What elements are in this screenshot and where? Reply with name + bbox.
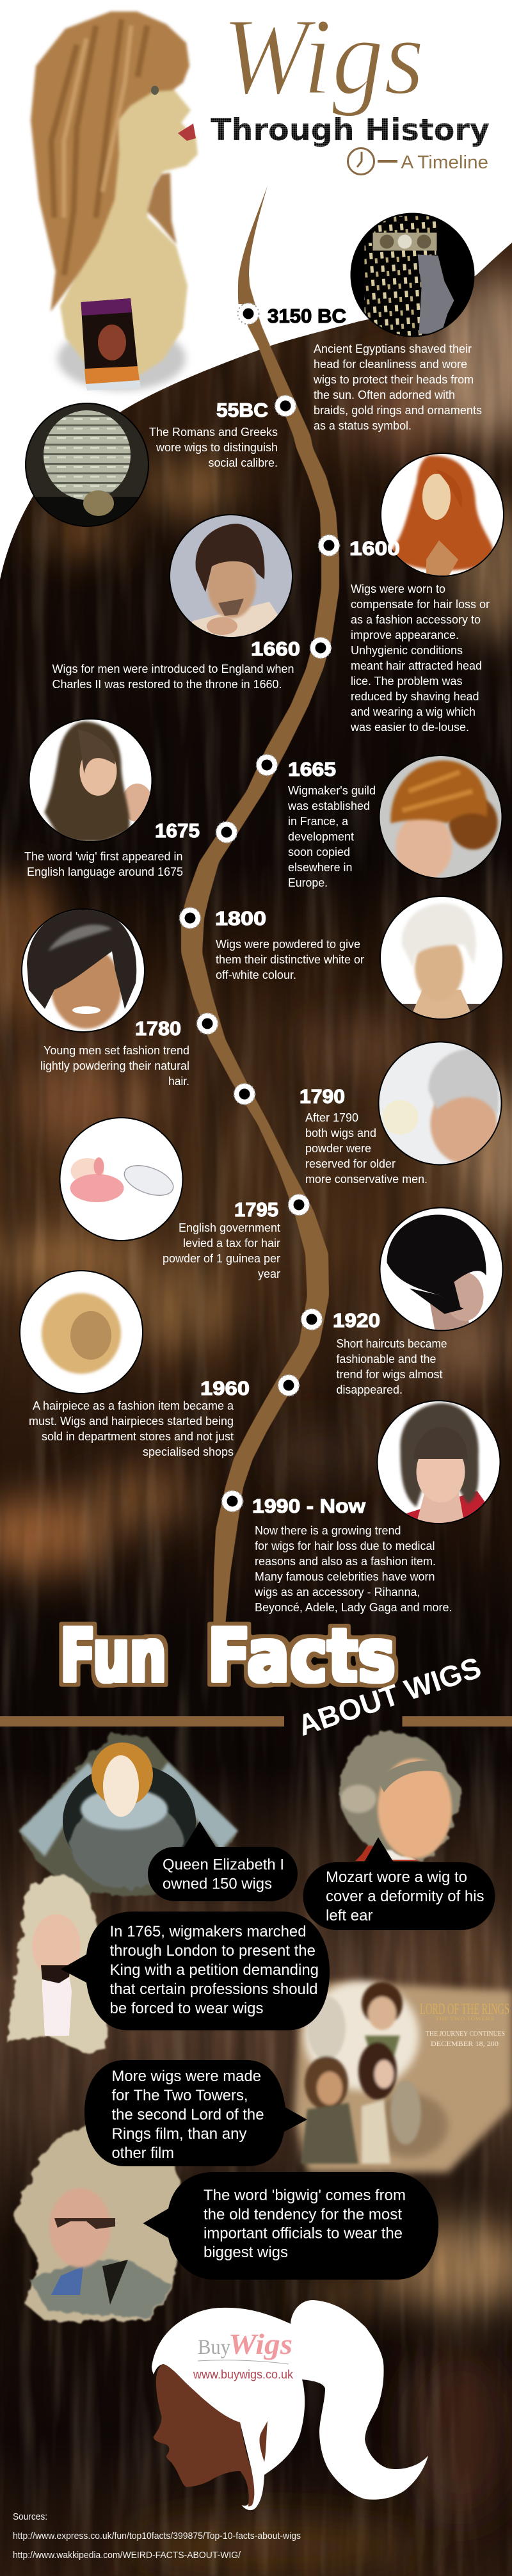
entry: 1665: 1665	[288, 758, 336, 780]
entry: 1665	[287, 758, 376, 889]
face silhouette	[154, 2364, 254, 2506]
portrait: man with grey wig and powder jar	[378, 1041, 502, 1165]
entry: 1990 - Now: 1990 - Now	[252, 1495, 366, 1517]
entry: 1795	[163, 1198, 280, 1280]
bubble: 1765 wigmakers: through London to present the	[110, 1942, 316, 1960]
entry: 1780	[40, 1017, 189, 1088]
title	[211, 0, 490, 174]
bubble: Mozart: left ear	[326, 1907, 373, 1924]
entry: 1920	[333, 1309, 447, 1396]
entry: 3150 BC: Ancient Egyptians shaved their	[314, 342, 472, 355]
portrait: black bob	[379, 1207, 503, 1332]
entry: 3150 BC: wigs to protect their heads from	[313, 373, 474, 386]
entry: 1800	[215, 907, 364, 981]
entry: 1960: specialised shops	[143, 1445, 234, 1458]
entry: 1600: compensate for hair loss or	[351, 597, 490, 611]
entry: 1665: elsewhere in	[288, 860, 352, 874]
entry: 3150 BC: braids, gold rings and ornaments	[314, 403, 482, 417]
product tag	[81, 298, 141, 390]
entry: 1960	[29, 1377, 250, 1458]
poster titles: DECEMBER 18, 200	[431, 2041, 499, 2048]
logo text Wigs: Wigs	[228, 2328, 292, 2360]
entry: 55BC	[149, 399, 278, 469]
entry: 1960: 1960	[200, 1377, 250, 1399]
bubble: bigwig: The word 'bigwig' comes from	[204, 2187, 406, 2204]
entry: 55BC: The Romans and Greeks	[149, 425, 278, 439]
entry: 1790: powder were	[305, 1141, 371, 1155]
portrait: Phil Spector caricature	[13, 2123, 179, 2321]
heading: Fun Facts: Facts	[207, 1613, 396, 1698]
entry: 1600: improve appearance.	[351, 628, 459, 641]
entry: 1990 - Now: for wigs for hair loss due to medical	[255, 1539, 435, 1552]
entry: 1675: The word 'wig' first appeared in	[24, 849, 183, 863]
portrait: judge's wig	[25, 403, 149, 529]
entry: 1795: 1795	[234, 1198, 278, 1221]
timeline ribbon	[181, 186, 339, 1645]
entry: 1920: disappeared.	[337, 1383, 403, 1396]
portrait: brunette bob	[376, 1400, 500, 1524]
entry: 55BC: wore wigs to distinguish	[156, 440, 278, 454]
entry: 1600: lice. The problem was	[351, 674, 462, 688]
entry: 1920: fashionable and the	[337, 1352, 436, 1365]
entry: 1665: development	[288, 830, 354, 843]
portrait: woman with wavy brown wig	[28, 718, 152, 842]
portrait: Mozart	[339, 1732, 462, 1861]
entry: 1790: more conservative men.	[305, 1172, 428, 1186]
bubble: The Two Towers: Rings film, than any	[111, 2125, 247, 2143]
entry: 1790: 1790	[300, 1085, 345, 1107]
entry: 1780: hair.	[168, 1074, 189, 1088]
entry: 1665: in France, a	[288, 814, 349, 828]
bubble: Queen Elizabeth: owned 150 wigs	[163, 1876, 272, 1892]
entry: 1990 - Now: Beyoncé, Adele, Lady Gaga and more.	[255, 1600, 452, 1614]
entry: 1660: 1660	[251, 638, 300, 660]
bubble: bigwig	[143, 2172, 438, 2280]
entry: 1990 - Now	[252, 1495, 452, 1614]
bubble: Mozart: Mozart wore a wig to	[326, 1869, 467, 1886]
entry: 1920: trend for wigs almost	[337, 1367, 443, 1381]
entry: 1600: 1600	[349, 537, 400, 559]
bubble: The Two Towers: More wigs were made	[111, 2068, 261, 2085]
entry: 1665: Europe.	[288, 876, 328, 889]
entry: 1795: English government	[179, 1221, 280, 1234]
poster figures	[301, 1982, 421, 2164]
entry: 1675	[24, 819, 200, 878]
portrait: blonde hairpiece	[19, 1270, 143, 1394]
logo url: www.buywigs.co.uk	[193, 2369, 293, 2381]
portrait: Queen Elizabeth I	[19, 1734, 238, 1895]
bubble: The Two Towers	[84, 2060, 307, 2166]
entry: 1660: Wigs for men were introduced to England when	[52, 662, 294, 675]
portrait: Lord of the Rings poster	[294, 1981, 512, 2172]
entry: 55BC: 55BC	[216, 399, 268, 421]
entry: 1920: Short haircuts became	[337, 1337, 447, 1350]
bust	[60, 83, 198, 377]
bubble: Mozart: cover a deformity of his	[326, 1888, 484, 1905]
bubble: 1765 wigmakers: In 1765, wigmakers marched	[110, 1923, 306, 1940]
portrait: man with short dark wig	[169, 514, 293, 638]
entry: 1800: 1800	[215, 907, 266, 930]
bubble: The Two Towers: the second Lord of the	[111, 2106, 264, 2123]
sources: Sources:	[13, 2511, 47, 2522]
entry: 1795: powder of 1 guinea per	[163, 1252, 280, 1265]
entry: 1960: A hairpiece as a fashion item became a	[33, 1399, 234, 1412]
heading: About Wigs: ABOUT WIGS	[294, 1650, 485, 1742]
bubble: The Two Towers: other film	[111, 2145, 174, 2162]
entry: 1675: 1675	[155, 819, 200, 842]
entry: 1780: 1780	[135, 1017, 181, 1040]
poster titles: THE JOURNEY CONTINUES	[426, 2031, 505, 2038]
entry: 1990 - Now: reasons and also as a fashion item.	[255, 1554, 436, 1568]
entry: 1665: Wigmaker's guild	[288, 784, 376, 797]
portrait: white hair	[380, 896, 504, 1023]
entry: 1600: reduced by shaving head	[351, 689, 479, 703]
heading: Fun Facts	[60, 1613, 396, 1698]
entry: 1960: must. Wigs and hairpieces started being	[29, 1414, 234, 1428]
entry: 1920: 1920	[333, 1309, 380, 1332]
white header area	[0, 0, 512, 579]
poster titles	[420, 2001, 509, 2048]
heading bars	[0, 1716, 512, 1727]
bubble: The Two Towers: for The Two Towers,	[111, 2087, 248, 2104]
entry: 1780: lightly powdering their natural	[40, 1059, 189, 1072]
sources: http://www.wakkipedia.com/WEIRD-FACTS-ABOUT-WIG/	[13, 2550, 241, 2561]
bubble: Queen Elizabeth: Queen Elizabeth I	[163, 1856, 284, 1873]
eye and lips	[151, 86, 159, 95]
entry: 1800: Wigs were powdered to give	[216, 937, 360, 951]
entry: 1790	[300, 1085, 428, 1186]
entry: 3150 BC: 3150 BC	[268, 305, 346, 327]
bubble: Mozart	[303, 1837, 495, 1930]
entry: 1600: Wigs were worn to	[351, 582, 445, 595]
entry: 1600	[349, 537, 490, 734]
bubble: bigwig: important officials to wear the	[204, 2225, 403, 2242]
mannequin with wig	[31, 12, 198, 390]
entry: 55BC: social calibre.	[209, 456, 278, 469]
entry: 1960: sold in department stores and not just	[42, 1429, 234, 1443]
entry: 1600: as a fashion accessory to	[351, 613, 481, 626]
bubble: 1765 wigmakers: that certain professions should	[110, 1981, 317, 1998]
entry: 1600: Unhygienic conditions	[351, 643, 463, 657]
sources: http://www.express.co.uk/fun/top10facts/399875/Top-10-facts-about-wigs	[13, 2531, 301, 2541]
entry: 1990 - Now: Many famous celebrities have worn	[255, 1570, 435, 1583]
wig hair	[31, 12, 189, 312]
portrait: judge caricature	[6, 1876, 108, 2055]
bubble: 1765 wigmakers	[61, 1912, 330, 2031]
entry: 1780: Young men set fashion trend	[44, 1043, 189, 1057]
entry: 1600: and wearing a wig which	[351, 705, 476, 718]
entry: 1675: English language around 1675	[27, 865, 183, 878]
portrait: Egyptian headdress	[351, 213, 475, 339]
back lock of hair	[147, 173, 177, 245]
entry: 1990 - Now: Now there is a growing trend	[255, 1524, 401, 1537]
portrait: man with dark fringe	[21, 908, 145, 1033]
heading: Fun Facts: Fun	[60, 1613, 166, 1698]
portrait: short ginger wig	[379, 755, 503, 880]
entry: 3150 BC: the sun. Often adorned with	[314, 388, 455, 401]
bubble: bigwig: the old tendency for the most	[204, 2206, 402, 2223]
entry: 1800: off-white colour.	[216, 968, 296, 981]
entry: 3150 BC	[268, 305, 482, 432]
sources	[13, 2511, 301, 2561]
bubble: bigwig: biggest wigs	[204, 2244, 288, 2261]
entry: 1600: meant hair attracted head	[351, 659, 482, 672]
icon: clock	[348, 149, 397, 174]
timeline markers	[179, 303, 339, 1512]
entry: 3150 BC: as a status symbol.	[314, 419, 412, 432]
poster titles: THE TWO TOWERS	[435, 2016, 494, 2022]
entry: 1990 - Now: wigs as an accessory - Rihanna,	[254, 1585, 420, 1598]
entry: 1800: them their distinctive white or	[216, 953, 364, 966]
logo text Buy: Buy	[198, 2336, 230, 2359]
entry: 3150 BC: head for cleanliness and wore	[314, 357, 467, 371]
bubble: Queen Elizabeth	[148, 1821, 298, 1901]
entry: 1790: reserved for older	[305, 1157, 396, 1170]
entry: 1795: year	[258, 1267, 280, 1280]
entry: 1665: soon copied	[288, 845, 350, 858]
portrait: red wig	[380, 453, 504, 577]
bubble: 1765 wigmakers: be forced to wear wigs	[110, 2000, 264, 2017]
entry: 1665: was established	[287, 799, 370, 812]
entry: 1660: Charles II was restored to the throne in 1660.	[52, 677, 282, 691]
entry: 1790: both wigs and	[305, 1126, 376, 1139]
portrait: pink powder box	[59, 1117, 183, 1241]
shadow	[58, 326, 186, 390]
entry: 1660	[52, 638, 300, 691]
subtitle: A Timeline: A Timeline	[401, 152, 488, 173]
logo: BuyWigs silhouette	[152, 2300, 428, 2510]
hair strand gap	[259, 2421, 268, 2462]
entry: 1600: was easier to de-louse.	[350, 720, 469, 734]
entry: 1790: After 1790	[305, 1111, 358, 1124]
entry: 1795: levied a tax for hair	[183, 1236, 280, 1250]
title: Through History: Through History	[211, 113, 490, 148]
hair silhouette	[152, 2300, 428, 2510]
bubble: 1765 wigmakers: King with a petition demanding	[110, 1961, 319, 1979]
